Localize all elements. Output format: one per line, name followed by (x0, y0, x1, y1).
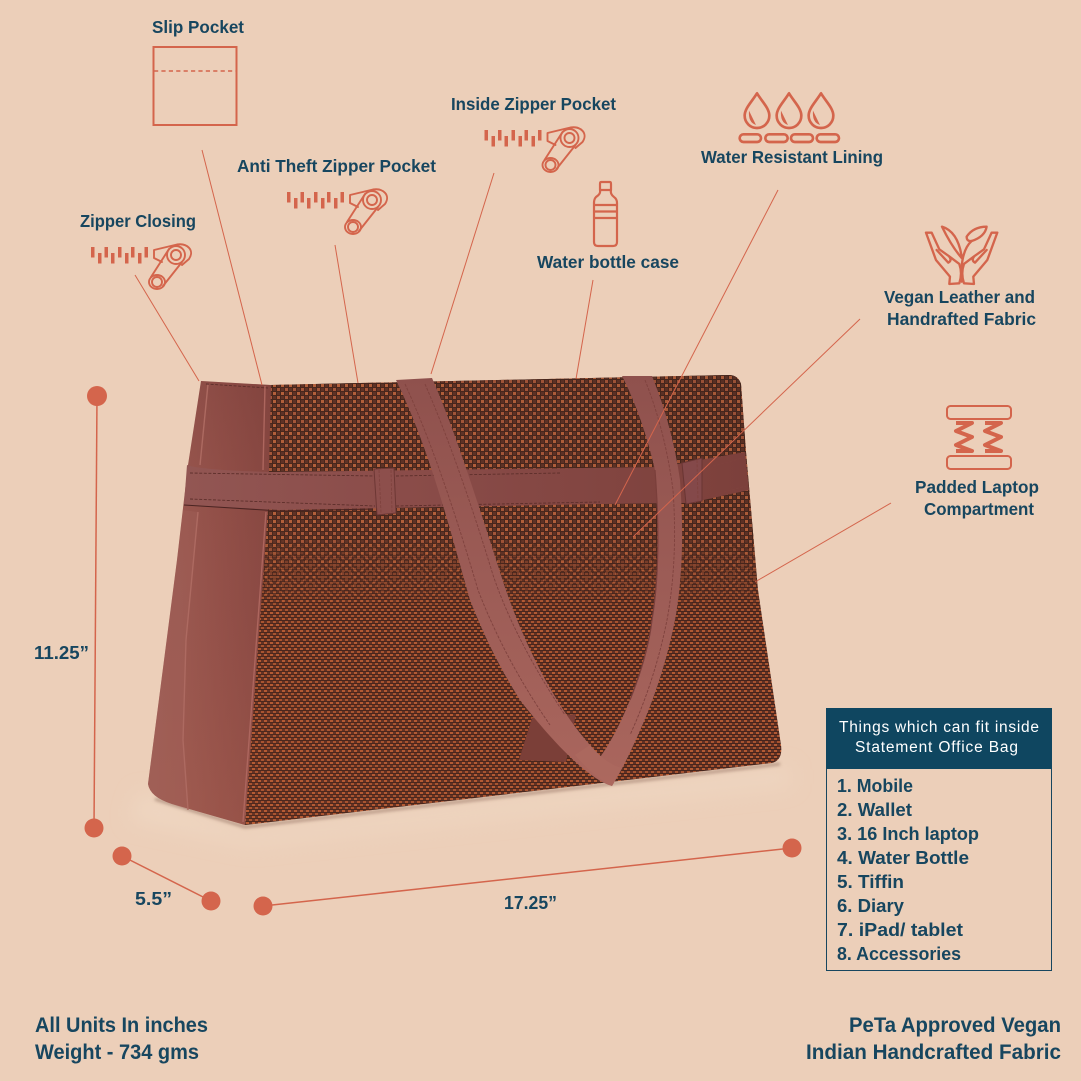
dimension: width (254, 838, 802, 916)
leader line: water bottle (576, 280, 593, 379)
leader line: anti theft zipper (335, 245, 358, 383)
leader line: water resistant lining (615, 190, 778, 505)
panel header: Statement Office Bag (855, 739, 1018, 756)
dimension: depth (112, 846, 220, 910)
dimension: width: 17.25” (504, 893, 557, 913)
waist belt (184, 452, 749, 511)
icon: slip pocket (154, 47, 236, 125)
icon: anti theft zipper (287, 189, 387, 234)
footer note: vegan and handcrafted: PeTa Approved Vegan (849, 1014, 1061, 1037)
bag fabric body (245, 375, 781, 825)
panel: things which fit inside (826, 708, 1052, 970)
icon: zipper closing (91, 244, 191, 289)
right strap (590, 376, 682, 786)
heading: padded laptop compartment (915, 477, 1039, 519)
item list: 3. 16 Inch laptop (837, 824, 979, 844)
belt loop right (682, 458, 702, 504)
footer note: units and weight: Weight - 734 gms (35, 1041, 199, 1064)
icon: hands and plant (926, 227, 997, 284)
item list: 4. Water Bottle (837, 848, 969, 868)
icon: padding springs (947, 406, 1011, 469)
heading: vegan leather and handcrafted fabric: Handrafted Fabric (887, 309, 1036, 329)
bag ground shadow (130, 768, 790, 845)
leader line: inside zipper (431, 173, 494, 374)
bag contact shadow (155, 764, 780, 827)
dimension: height (34, 386, 107, 838)
left strap (396, 378, 634, 786)
item list: 5. Tiffin (837, 872, 904, 892)
item list: 2. Wallet (837, 800, 912, 820)
icon: water drops (740, 93, 839, 142)
item list: 8. Accessories (837, 944, 961, 964)
dimension: depth: 5.5” (135, 889, 172, 909)
logo patch (519, 714, 576, 762)
item list: 7. iPad/ tablet (837, 920, 963, 940)
belt loop left (374, 468, 396, 515)
heading: padded laptop compartment: Padded Laptop (915, 477, 1039, 497)
leader line: padded laptop (755, 503, 891, 582)
item list (837, 776, 979, 964)
bag side leather panel (148, 381, 271, 825)
heading: vegan leather and handcrafted fabric (884, 287, 1036, 329)
icon: inside zipper (484, 127, 585, 172)
heading: slip pocket: Slip Pocket (152, 17, 244, 37)
footer note: units and weight: All Units In inches (35, 1014, 208, 1037)
footer note: vegan and handcrafted (806, 1014, 1061, 1064)
heading: anti theft zipper pocket: Anti Theft Zipper Pocket (237, 156, 436, 176)
item list: 6. Diary (837, 896, 904, 916)
bag illustration (130, 375, 790, 845)
heading: inside zipper pocket: Inside Zipper Pocket (451, 94, 616, 114)
heading: padded laptop compartment: Compartment (924, 499, 1034, 519)
heading: zipper closing: Zipper Closing (80, 211, 196, 231)
icon: water bottle (594, 182, 617, 246)
heading: water bottle case: Water bottle case (537, 252, 679, 272)
heading: vegan leather and handcrafted fabric: Vegan Leather and (884, 287, 1035, 307)
panel header (826, 708, 1052, 769)
leader line: slip pocket (202, 150, 262, 385)
leader line: zipper closing (135, 275, 199, 381)
item list: 1. Mobile (837, 776, 913, 796)
dimension: height: 11.25” (34, 643, 89, 663)
footer note: vegan and handcrafted: Indian Handcrafted Fabric (806, 1041, 1061, 1064)
leader line: vegan leather (633, 319, 860, 537)
heading: water resistant lining: Water Resistant Lining (701, 147, 883, 167)
panel header: Things which can fit inside (839, 719, 1039, 736)
footer note: units and weight (35, 1014, 208, 1064)
